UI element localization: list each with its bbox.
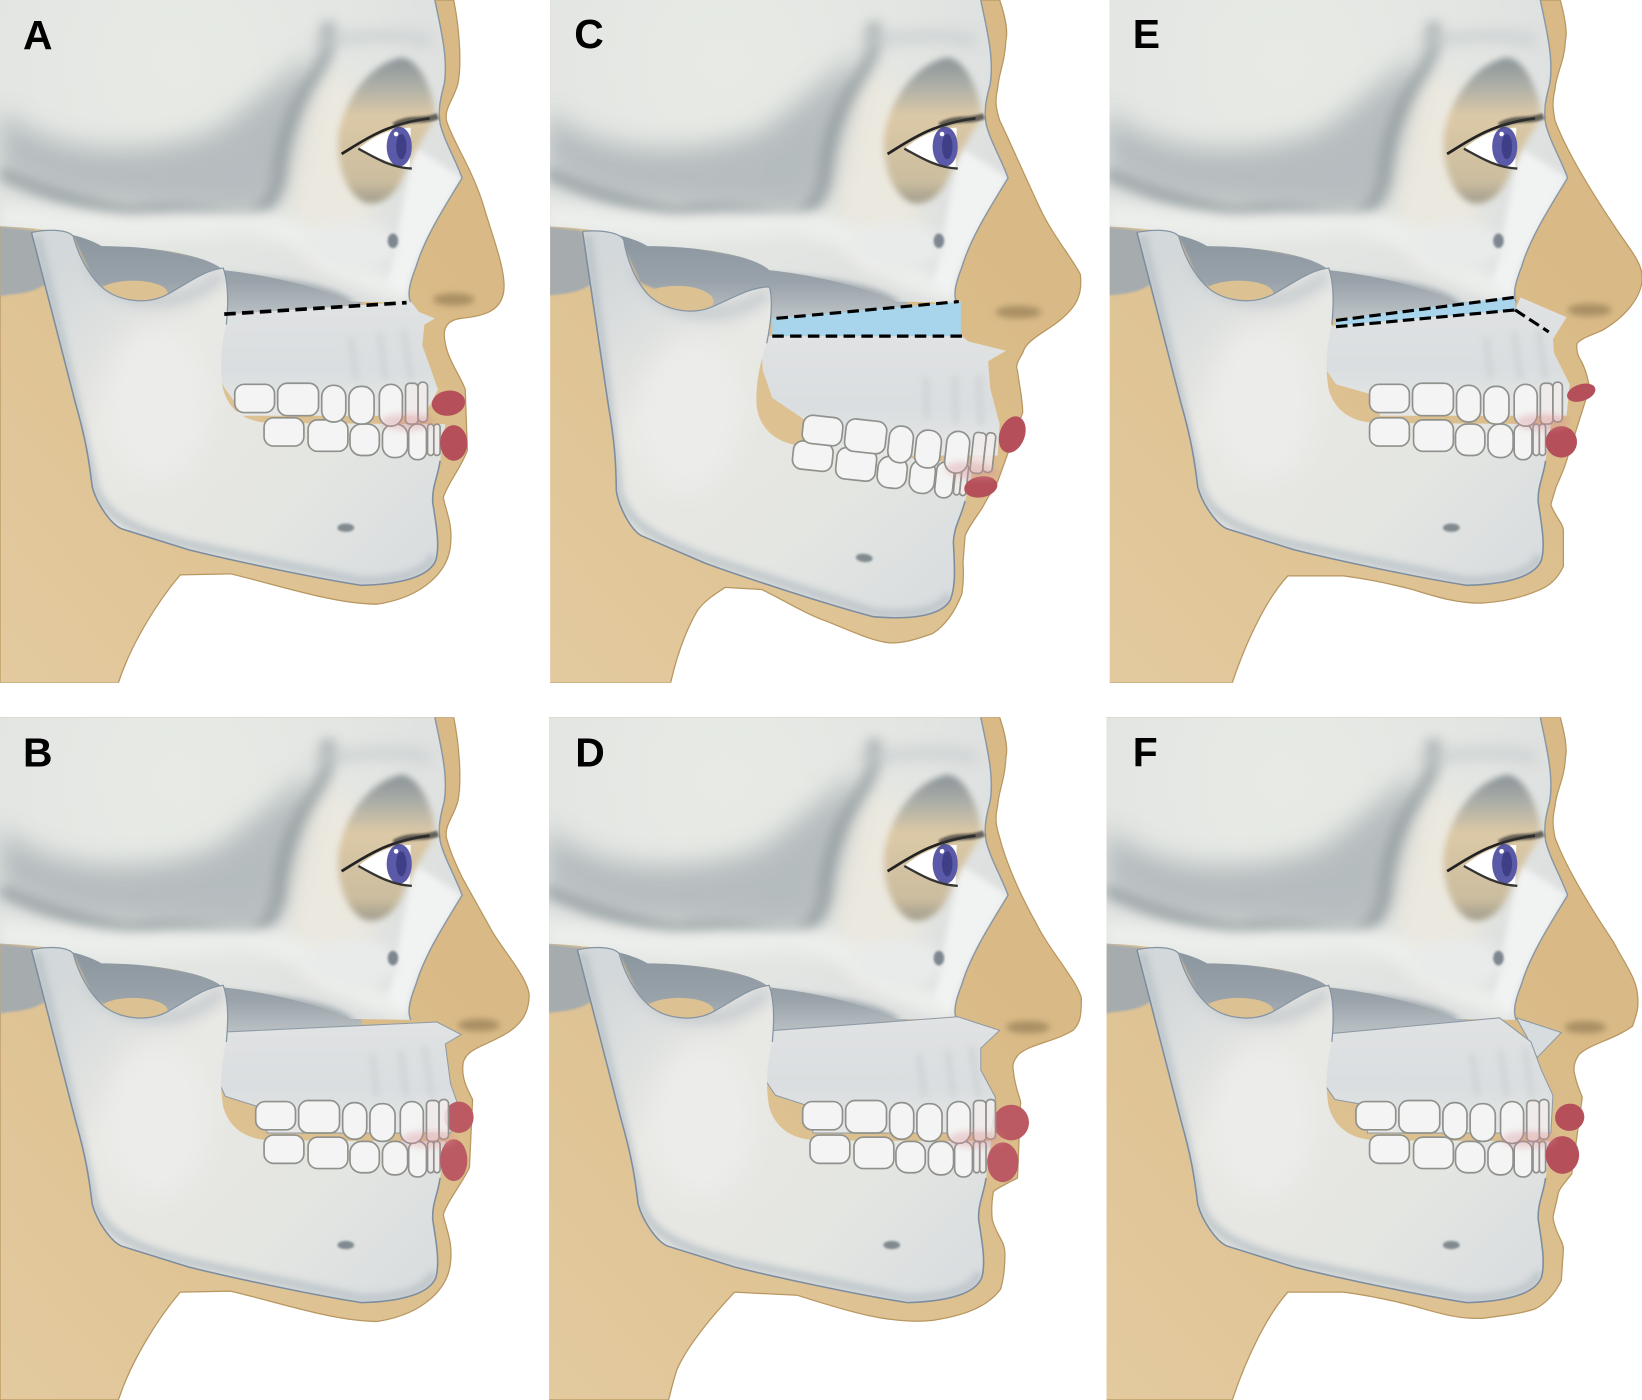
label C: C [574, 11, 604, 57]
maxilla C [761, 336, 1006, 455]
panel D: result after bilateral advancement [546, 717, 1081, 1400]
maxilla E [1320, 297, 1570, 416]
panel E: maxillary impaction [1105, 0, 1642, 683]
nostril E [1568, 304, 1612, 316]
lips F [1546, 1101, 1587, 1174]
skin profile C [546, 0, 1081, 683]
nostril B [458, 1019, 500, 1031]
label B: B [23, 730, 53, 775]
skin profile E [1105, 0, 1642, 683]
nostril D [1006, 1021, 1050, 1034]
nostril F [1564, 1021, 1606, 1034]
blue bone graft wedge C [772, 302, 961, 336]
skin profile A [0, 0, 504, 683]
skin profile D [546, 717, 1081, 1400]
label D: D [575, 730, 605, 775]
osteotomy lines C [772, 302, 962, 336]
label F: F [1133, 730, 1158, 775]
skin profile B [0, 717, 529, 1400]
osteotomy line A [224, 303, 407, 314]
maxilla A [215, 302, 438, 416]
lips A [430, 388, 467, 461]
nostril A [433, 293, 475, 306]
label A: A [23, 12, 53, 58]
lips D [987, 1105, 1029, 1182]
panel F: result after impaction [1105, 717, 1638, 1400]
maxilla B [215, 1022, 461, 1133]
lips E [1546, 380, 1598, 458]
nostril C [995, 306, 1042, 318]
anterior nasal spine fragment F [1516, 1018, 1561, 1058]
blue resection strip E [1336, 296, 1515, 327]
panel B: mandibular advancement [0, 717, 529, 1400]
skin profile F [1105, 717, 1638, 1400]
label E: E [1133, 11, 1160, 57]
maxilla D [761, 1017, 1000, 1133]
lips C [962, 413, 1031, 500]
panel C: maxillary downgraft with wedge [546, 0, 1081, 683]
panel A: original position [0, 0, 504, 683]
osteotomy lines E [1336, 297, 1549, 332]
maxilla F [1320, 1018, 1553, 1133]
lips B [440, 1102, 474, 1181]
